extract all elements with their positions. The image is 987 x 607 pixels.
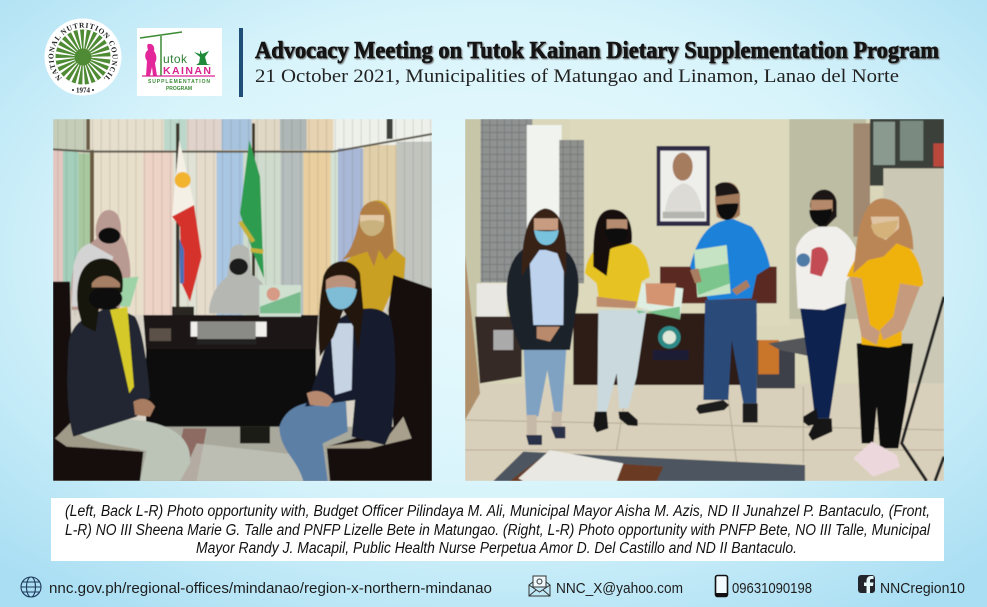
logo: Tutok Kainan Supplementation Program: PROGRAM [166,86,192,92]
photo: left, Matungao meeting [53,119,432,482]
logo: Tutok Kainan Supplementation Program [137,28,222,96]
person: front right seated in navy cardigan [279,261,412,481]
easel stand [902,297,944,481]
logo: National Nutrition Council seal: NATIONAL NUTRITION COUNCIL [48,22,118,82]
Philippine flag [172,123,202,315]
person: back right in yellow polo [340,200,406,320]
logo: Tutok Kainan Supplementation Program: KAINAN [163,65,211,77]
person 1: PNFP Bete [507,208,579,445]
footer: email [529,576,683,597]
chair: left [53,282,143,481]
framed portrait [657,146,710,226]
person: back left in hijab [71,210,139,310]
footer: phone [716,576,812,597]
floor mat and papers [493,450,805,481]
municipal flag [240,123,264,297]
footer: Facebook [858,575,965,597]
footer: Facebook: NNCregion10 [880,580,965,597]
subtitle: date and location: 21 October 2021, Municipalities of Matungao and Linamon, Lanao del Norte [255,67,899,87]
person: seated at desk [209,244,301,317]
logo: Tutok Kainan Supplementation Program: utok [163,52,188,66]
blinds upper band [53,119,432,150]
person: front left seated in black blazer [55,258,190,481]
footer: email: NNC_X@yahoo.com [556,580,683,597]
blinds lower band [53,119,432,316]
title: Advocacy Meeting on Tutok Kainan Dietary Supplementation Program [255,38,939,64]
person 5: ND II Bantaculo [847,198,923,477]
person 4: Public Health Nurse Del Castillo [796,190,859,441]
desk [53,315,432,482]
photo: right, Linamon meeting [465,119,944,481]
caption box: Mayor Randy J. Macapil, Public Health Nurse Perpetua Amor D. Del Castillo and ND II Bantaculo. [196,540,797,557]
curtains [481,119,584,283]
caption box [51,498,944,561]
footer: website: nnc.gov.ph/regional-offices/mindanao/region-x-northern-mindanao [49,580,492,597]
header divider bar [239,28,243,97]
logo: National Nutrition Council seal: • 1974 • [72,86,95,94]
person 2: NO III Talle [585,209,683,432]
logo: Tutok Kainan Supplementation Program: SUPPLEMENTATION [148,79,210,85]
footer: phone: 09631090198 [732,580,812,597]
desk [475,267,812,388]
room structure [465,119,944,481]
person 3: Mayor Macapil [690,182,770,423]
chair: right [327,275,432,481]
